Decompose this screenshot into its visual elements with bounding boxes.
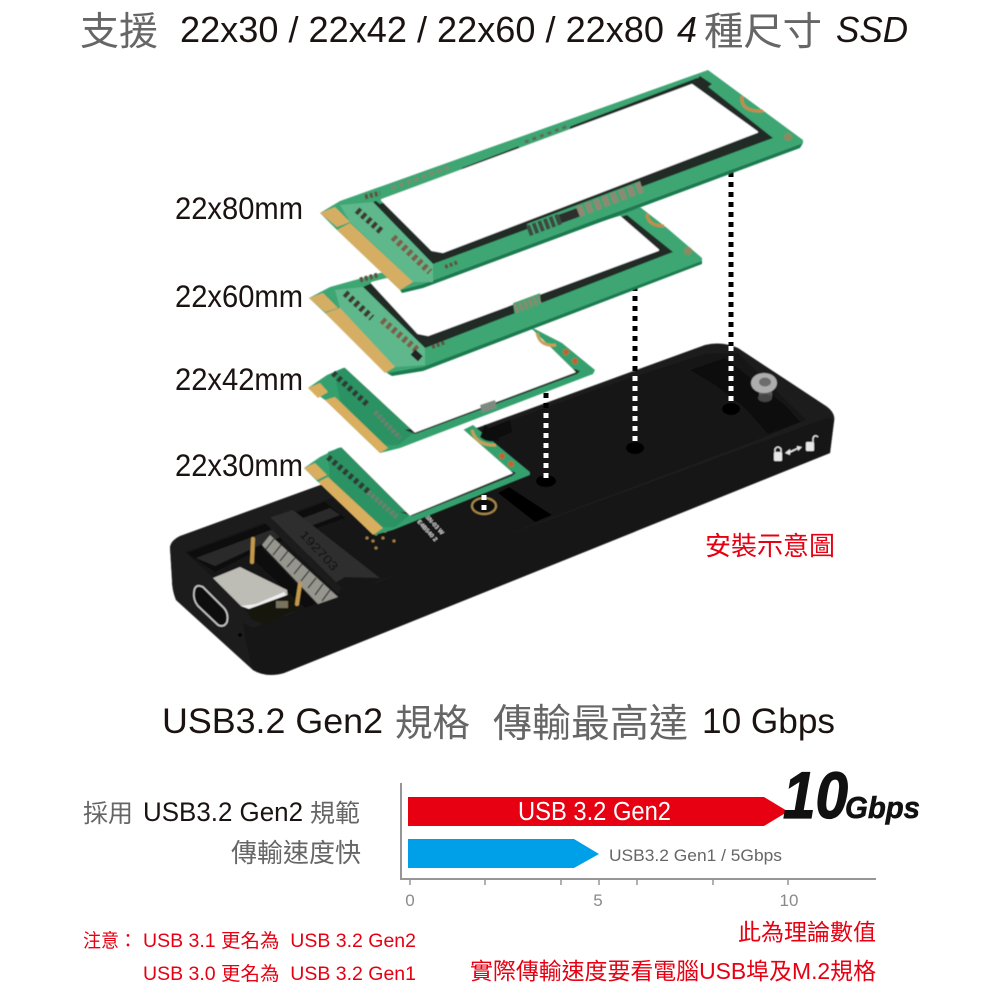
board print — [416, 514, 444, 544]
title: SSD — [836, 9, 908, 50]
speed chart: USB3.2 Gen1 / 5Gbps — [609, 847, 782, 865]
small components — [246, 594, 300, 624]
dark slot — [498, 487, 552, 522]
USB-C port — [194, 586, 228, 626]
lock icons — [774, 436, 818, 461]
10Gbps callout — [783, 758, 920, 832]
title: 4 — [677, 9, 697, 50]
10Gbps callout: Gbps — [845, 790, 920, 825]
note: renamed standards: USB 3.1 更名為 USB 3.2 Gen2 — [143, 930, 416, 952]
enclosure front face — [170, 546, 253, 670]
size labels: 22x60mm — [175, 278, 303, 314]
note: renamed standards: USB 3.0 更名為 USB 3.2 Gen1 — [143, 963, 416, 985]
mounting holes — [536, 475, 556, 487]
gold contact dots — [366, 530, 396, 550]
side description: 傳輸速度快 — [231, 838, 361, 868]
axis labels: 5 — [593, 891, 603, 910]
bar: USB 3.2 Gen2 — [408, 797, 788, 826]
recess right — [690, 358, 800, 434]
size labels: 22x30mm — [175, 447, 303, 483]
title: 22x30 / 22x42 / 22x60 / 22x80 — [180, 9, 664, 50]
title — [80, 9, 908, 54]
10Gbps callout: 10 — [783, 758, 848, 832]
note: renamed standards: 注意： — [83, 930, 137, 952]
board print: E4B540 2 — [416, 519, 438, 544]
note: theoretical value: 此為理論數值 — [738, 919, 876, 945]
axes — [401, 783, 876, 879]
heading: spec: 10 Gbps — [702, 702, 835, 741]
speed chart: USB 3.2 Gen2 — [518, 798, 671, 826]
SSD 22x80 — [320, 70, 803, 293]
speed chart — [401, 758, 920, 910]
axis labels: 0 — [405, 891, 415, 910]
connector pins — [262, 535, 338, 604]
heading: spec: 傳輸最高達 — [493, 703, 688, 746]
side description — [83, 797, 361, 868]
gold ring hole — [472, 498, 496, 514]
drop guide lines — [484, 172, 731, 511]
side description: 採用 — [83, 800, 133, 828]
bar: USB 3.2 Gen1 — [408, 839, 599, 868]
LED hole — [238, 633, 242, 637]
enclosure long side — [243, 418, 834, 675]
M.2 connector — [262, 510, 380, 594]
SSD 22x30 — [304, 425, 530, 535]
heading: spec: USB3.2 Gen2 — [162, 702, 383, 741]
silkscreen strip — [248, 548, 316, 608]
title: 種尺寸 — [704, 11, 822, 54]
SSD 22x42 — [308, 325, 595, 453]
heading: spec — [162, 702, 835, 746]
recess near card — [476, 420, 512, 442]
M.2 connector: 192703 — [297, 528, 341, 573]
axis labels: 10 — [780, 891, 798, 910]
SSD 22x60 — [309, 207, 702, 376]
groove left — [187, 502, 345, 572]
note: renamed standards — [83, 930, 416, 985]
heading: spec: 規格 — [395, 702, 470, 744]
board print: SN-03 W — [424, 514, 444, 537]
size labels: 22x80mm — [175, 190, 303, 226]
screw — [751, 373, 777, 402]
install caption: 安裝示意圖 — [705, 531, 835, 561]
size labels — [175, 190, 303, 483]
axis labels — [405, 891, 798, 910]
gold pogo pins — [252, 539, 300, 604]
size labels: 22x42mm — [175, 361, 303, 397]
enclosure — [170, 344, 834, 675]
USB-C metal shell — [213, 567, 288, 612]
cavity floor — [185, 353, 806, 622]
side description: 規範 — [310, 800, 360, 828]
note: theoretical value: 實際傳輸速度要看電腦USB埠及M.2規格 — [470, 958, 876, 984]
side description: USB3.2 Gen2 — [143, 797, 303, 827]
title: 支援 — [80, 11, 158, 54]
note: theoretical value — [470, 919, 876, 984]
enclosure body — [170, 344, 834, 675]
